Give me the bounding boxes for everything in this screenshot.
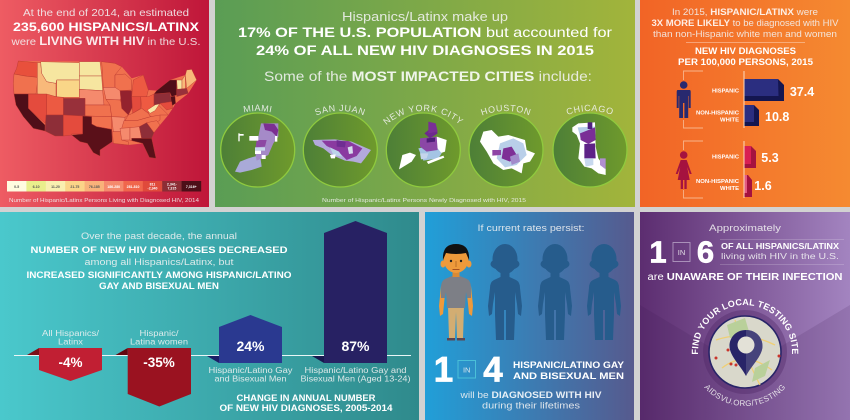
heading: past decade trend <box>26 231 292 291</box>
bar: non-Hispanic white men 10.8: NON-HISPANIC <box>696 110 739 116</box>
statistic: 1 in 6: living with HIV in the U.S. <box>721 252 839 261</box>
heading: approximately: Approximately <box>709 223 782 233</box>
heading: living with HIV: were LIVING WITH HIV in the U.S. <box>10 34 200 48</box>
badge: find your local testing site: FIND YOUR LOCAL TESTING SITE <box>692 298 798 354</box>
bar: Hispanic women 5.3: HISPANIC <box>712 154 739 160</box>
city: New York City <box>383 104 464 188</box>
panel: most impacted cities <box>215 0 635 207</box>
heading: three times more likely: 3X MORE LIKELY to be diagnosed with HIV <box>652 18 839 29</box>
bar: Hispanic men 37.4: HISPANIC <box>712 88 739 94</box>
map legend: 21-75 <box>70 185 79 189</box>
map legend: 7,316+ <box>186 185 197 189</box>
cities caption: Number of Hispanic/Latinx Persons Newly Diagnosed with HIV, 2015 <box>322 198 526 204</box>
map caption: Number of Hispanic/Latinx Persons Living with Diagnosed HIV, 2014 <box>9 198 200 204</box>
panel: lifetime risk <box>425 212 634 420</box>
map legend: 2,341- <box>167 182 178 186</box>
statistic: 1 in 6: 1 <box>649 234 667 270</box>
map legend: 6-10 <box>33 185 40 189</box>
statistic: 1 in 6: 6 <box>697 234 714 270</box>
city: San Juan <box>302 104 378 188</box>
map legend: 186-280 <box>107 185 120 189</box>
bar: gay and bisexual men aged 13-24 87%: 87% <box>341 338 370 354</box>
bar: all Hispanics/Latinx -4% <box>27 329 102 381</box>
statistic caption: will be DIAGNOSED WITH HIV <box>459 390 602 400</box>
statistic: 1 in 6 <box>649 234 844 270</box>
heading: past decade trend: INCREASED SIGNIFICANTLY AMONG HISPANIC/LATINO <box>26 270 292 280</box>
map legend: 281-810 <box>127 185 140 189</box>
statistic: 1 in 4: 4 <box>483 350 503 390</box>
bar: non-Hispanic white men 10.8: WHITE <box>720 118 740 124</box>
bar: gay and bisexual men aged 13-24 87%: Hispanic/Latino Gay and <box>304 366 406 375</box>
bar: non-Hispanic white women 1.6: NON-HISPANIC <box>696 179 739 185</box>
statistic caption <box>459 390 602 410</box>
bar: non-Hispanic white men 10.8: 10.8 <box>765 110 789 124</box>
chart caption: OF NEW HIV DIAGNOSES, 2005-2014 <box>220 403 392 413</box>
bar: gay and bisexual men 24% <box>207 315 292 384</box>
city: Chicago <box>552 104 628 188</box>
badge: find your local testing site: AIDSVU.ORG/TESTING <box>704 384 785 406</box>
bar: gay and bisexual men 24%: 24% <box>236 338 265 354</box>
bar: Hispanic men 37.4 <box>712 79 814 101</box>
icon: silhouette 4 <box>587 244 621 340</box>
map legend: -2,340 <box>148 186 158 190</box>
bar: non-Hispanic white men 10.8 <box>696 105 789 126</box>
map circle <box>709 316 781 388</box>
icon: location pin <box>730 330 762 376</box>
chart caption <box>220 393 392 413</box>
map legend: 811 <box>150 182 155 186</box>
heading: population share: 24% OF ALL NEW HIV DIAGNOSES IN 2015 <box>256 42 594 58</box>
bar: non-Hispanic white women 1.6: WHITE <box>720 186 740 192</box>
panel: diagnosis rates <box>640 0 850 207</box>
heading: population share <box>238 9 612 58</box>
heading: three times more likely <box>652 7 839 40</box>
bar: non-Hispanic white women 1.6 <box>696 175 772 197</box>
bar: Hispanic/Latina women -35%: Hispanic/ <box>140 329 179 338</box>
heading: living with HIV <box>10 7 200 48</box>
city: Miami: MIAMI <box>244 104 272 112</box>
heading: past decade trend: GAY AND BISEXUAL MEN <box>99 281 219 291</box>
chart title: PER 100,000 PERSONS, 2015 <box>678 57 814 68</box>
heading: three times more likely: than non-Hispanic white men and women <box>653 29 837 40</box>
badge: find your local testing site <box>692 298 798 406</box>
bar: Hispanic women 5.3: 5.3 <box>761 151 779 165</box>
map legend: 0-5 <box>14 185 19 189</box>
heading: unaware of infection: are UNAWARE OF THEIR INFECTION <box>648 272 842 283</box>
heading: population share: 17% OF THE U.S. POPULATION but accounted for <box>238 24 612 40</box>
bar: Hispanic/Latina women -35%: -35% <box>143 355 175 370</box>
bar: Hispanic men 37.4: 37.4 <box>790 85 814 99</box>
subheading: most impacted cities: Some of the MOST IMPACTED CITIES include: <box>264 69 592 84</box>
brackets and axes <box>684 71 703 198</box>
bar: Hispanic/Latina women -35% <box>116 329 191 406</box>
chart title <box>678 46 814 68</box>
statistic: 1 in 6: OF ALL HISPANICS/LATINX <box>721 242 840 251</box>
bar: gay and bisexual men aged 13-24 87% <box>300 221 411 384</box>
map legend: 7,315 <box>168 186 176 190</box>
choropleth map of the United States <box>13 61 197 158</box>
statistic: 1 in 4: IN <box>463 366 470 374</box>
bar: gay and bisexual men 24%: Hispanic/Latino Gay <box>208 366 292 375</box>
statistic: 1 in 4: AND BISEXUAL MEN <box>513 371 624 381</box>
chart caption: CHANGE IN ANNUAL NUMBER <box>236 393 376 403</box>
heading: current rates: If current rates persist: <box>478 223 584 233</box>
heading: past decade trend: Over the past decade, the annual <box>81 231 237 241</box>
city: Miami <box>220 104 296 188</box>
heading: three times more likely: In 2015, HISPANIC/LATINX were <box>672 7 818 18</box>
map legend <box>7 181 201 192</box>
statistic: 1 in 4 <box>434 350 624 390</box>
heading: past decade trend: among all Hispanics/Latinx, but <box>84 257 234 267</box>
bar: Hispanic women 5.3 <box>712 146 779 168</box>
bar: all Hispanics/Latinx -4%: Latinx <box>58 338 83 346</box>
heading: population share: Hispanics/Latinx make up <box>342 9 508 24</box>
icon: silhouette 3 <box>538 244 572 340</box>
city: Chicago: CHICAGO <box>566 104 613 114</box>
bar: non-Hispanic white women 1.6: 1.6 <box>754 179 772 193</box>
statistic caption: during their lifetimes <box>482 400 581 410</box>
icon: man <box>677 81 691 118</box>
bar: Hispanic/Latina women -35%: Latina women <box>130 338 188 346</box>
statistic: 1 in 4: 1 <box>434 350 453 390</box>
bar: all Hispanics/Latinx -4%: All Hispanics/ <box>42 329 100 338</box>
panel: unaware of infection <box>640 212 850 420</box>
panel: people living with HIV <box>0 0 209 207</box>
icon: illustrated man <box>439 244 473 340</box>
heading: living with HIV: At the end of 2014, an estimated <box>23 7 189 19</box>
bar: gay and bisexual men aged 13-24 87%: Bisexual Men (Aged 13-24) <box>300 374 411 384</box>
chart title: NEW HIV DIAGNOSES <box>695 46 796 57</box>
panel: change in new diagnoses <box>0 212 419 420</box>
map legend: 76-185 <box>89 185 100 189</box>
icon: woman <box>676 151 692 189</box>
statistic: 1 in 6: IN <box>678 248 685 257</box>
bar: gay and bisexual men 24%: and Bisexual Men <box>214 374 286 384</box>
city: Houston <box>468 104 544 188</box>
map legend: 11-20 <box>51 185 60 189</box>
city: Houston: HOUSTON <box>480 104 531 116</box>
heading: living with HIV: 235,600 HISPANICS/LATINX <box>13 20 199 34</box>
icon: silhouette 2 <box>488 244 522 340</box>
statistic: 1 in 4: HISPANIC/LATINO GAY <box>513 360 624 370</box>
bar: all Hispanics/Latinx -4%: -4% <box>58 355 83 370</box>
city: New York City: NEW YORK CITY <box>383 104 464 125</box>
heading: past decade trend: NUMBER OF NEW HIV DIAGNOSES DECREASED <box>30 245 288 256</box>
city: San Juan: SAN JUAN <box>315 104 365 116</box>
